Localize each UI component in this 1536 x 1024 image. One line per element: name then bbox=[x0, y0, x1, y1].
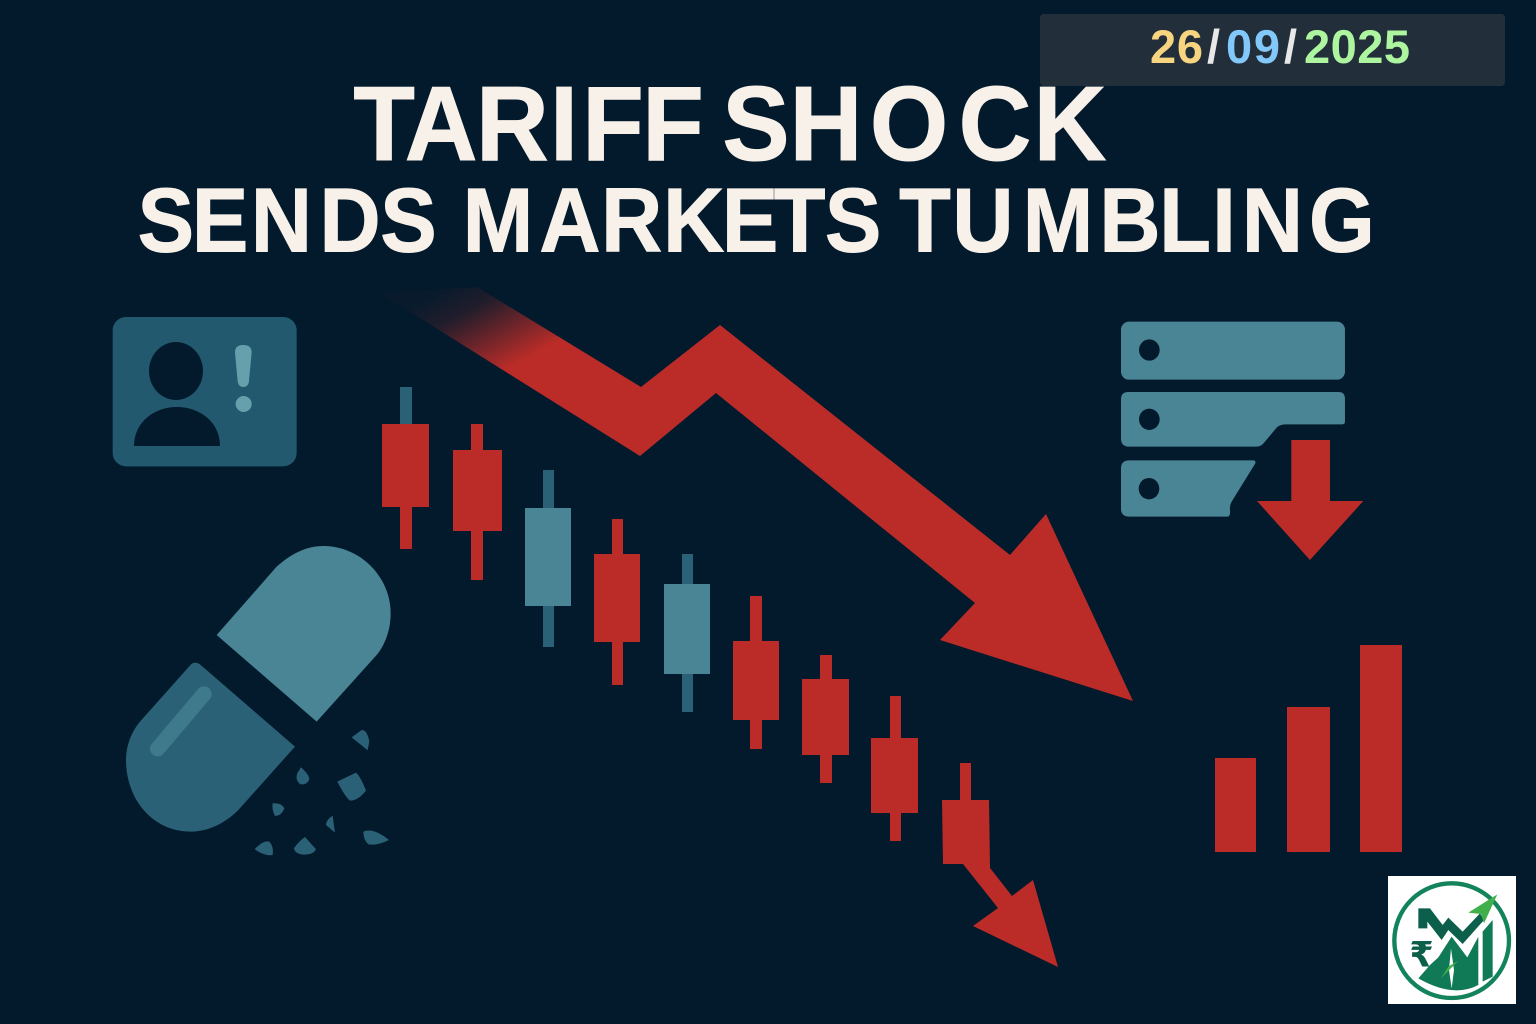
candle 7 bbox=[802, 655, 849, 783]
logo compass needle bbox=[1449, 948, 1454, 988]
date badge bbox=[1040, 14, 1505, 86]
candle 3 bbox=[525, 470, 571, 647]
date badge: / bbox=[1207, 20, 1220, 73]
candle 6 bbox=[733, 596, 779, 749]
logo M zigzag line bbox=[1418, 908, 1484, 944]
icon: person alert card bbox=[113, 317, 297, 466]
candle 2 bbox=[453, 424, 502, 580]
logo bbox=[1388, 876, 1516, 1004]
icon: server stack bbox=[1121, 322, 1363, 560]
candle 1 bbox=[382, 387, 429, 549]
title: TARIFF SHOCK bbox=[353, 64, 1106, 183]
title: SENDS MARKETS TUMBLING bbox=[138, 169, 1375, 271]
date badge: 26 bbox=[1150, 20, 1203, 73]
main falling red arrow bbox=[380, 287, 1133, 701]
bar chart bbox=[1215, 645, 1402, 852]
date badge: 09 bbox=[1226, 20, 1280, 73]
server row 3 bbox=[1121, 460, 1255, 517]
server row 1 bbox=[1121, 322, 1345, 380]
pill fragments bbox=[255, 730, 389, 855]
logo rupee sign: ₹ bbox=[1409, 936, 1434, 976]
pill highlight bbox=[158, 694, 204, 749]
pill lower half bbox=[126, 663, 295, 832]
icon: down arrow bbox=[1257, 440, 1363, 560]
candle 8 bbox=[871, 696, 918, 841]
candle 4 bbox=[594, 519, 640, 685]
logo chart mountains bbox=[1418, 937, 1478, 990]
date badge: / bbox=[1284, 20, 1297, 73]
date badge: 2025 bbox=[1304, 20, 1410, 73]
icon: broken pill bbox=[126, 546, 391, 855]
server row 2 bbox=[1121, 392, 1345, 447]
pill upper half bbox=[217, 546, 391, 722]
logo arrow head bbox=[1468, 894, 1497, 923]
title bbox=[138, 64, 1375, 271]
candlestick chart bbox=[382, 387, 1058, 967]
candle 9 with arrow bbox=[942, 763, 1058, 967]
candle 5 bbox=[664, 554, 710, 712]
